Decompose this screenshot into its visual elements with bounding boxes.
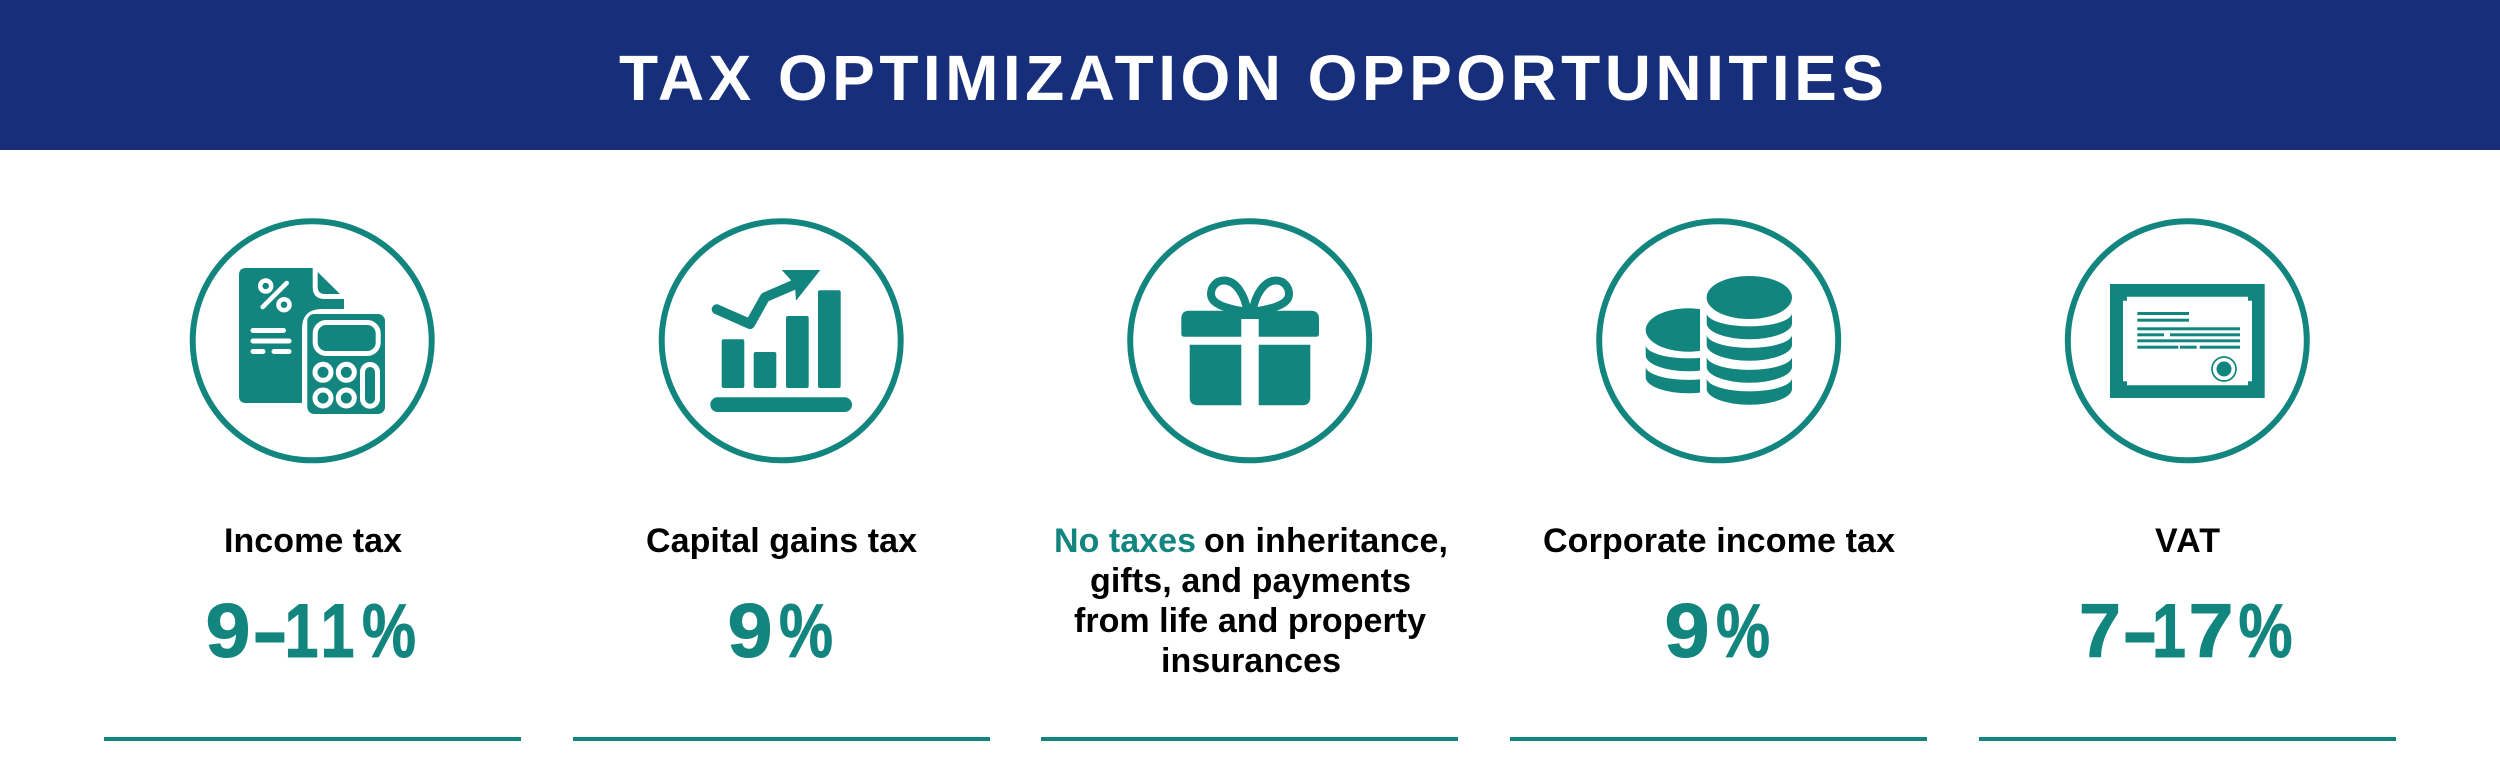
icon: coin stacks <box>1599 221 1838 460</box>
label: no taxes on inheritance, gifts, and payments from life and property insurances <box>1054 522 1448 680</box>
value: 7-17%: % <box>2238 589 2292 674</box>
label: no taxes on inheritance, gifts, and payments from life and property insurances: No taxes <box>1054 522 1196 560</box>
divider <box>1510 737 1927 741</box>
value: 9-11%: - <box>252 589 288 674</box>
divider <box>104 737 521 741</box>
value: 9-11%: % <box>362 589 416 674</box>
icon: gift box <box>1130 221 1369 460</box>
value: 9-11%: 1 <box>320 589 354 674</box>
divider <box>573 737 990 741</box>
value: 7-17%: 7 <box>2188 589 2234 674</box>
icon: certificate <box>2068 221 2307 460</box>
panel: corporate income tax <box>1510 221 1927 741</box>
label: no taxes on inheritance, gifts, and payments from life and property insurances: from life and property <box>1074 602 1426 640</box>
value: 7-17%: - <box>2122 589 2158 674</box>
icon: rising bar chart <box>662 221 901 460</box>
panel: income tax <box>104 221 521 741</box>
label: VAT: VAT <box>2155 522 2220 560</box>
title banner <box>0 0 2500 150</box>
value: 9-11%: 9 <box>206 589 250 674</box>
icon: tax document and calculator <box>193 221 432 460</box>
label: no taxes on inheritance, gifts, and payments from life and property insurances: gifts, and payments <box>1090 562 1411 600</box>
value: 9%: 9 <box>728 589 772 674</box>
label: income tax: Income tax <box>224 522 402 560</box>
value: 9-11%: 1 <box>284 589 318 674</box>
value: 9%: 9 <box>1664 589 1710 674</box>
label: corporate income tax: Corporate income tax <box>1543 522 1895 560</box>
panel: capital gains tax <box>573 221 990 741</box>
divider <box>1979 737 2396 741</box>
label: capital gains tax: Capital gains tax <box>646 522 917 560</box>
value: 7-17%: 1 <box>2152 589 2186 674</box>
label: no taxes on inheritance, gifts, and payments from life and property insurances: insurances <box>1161 642 1341 680</box>
divider <box>1041 737 1458 741</box>
title: TAX OPTIMIZATION OPPORTUNITIES <box>619 42 1884 114</box>
value: 9%: % <box>779 589 833 674</box>
panel: VAT <box>1979 221 2396 741</box>
value: 9%: % <box>1716 589 1770 674</box>
value: 7-17%: 7 <box>2079 589 2121 674</box>
panel: no taxes on inheritance <box>1041 221 1458 741</box>
label: no taxes on inheritance, gifts, and payments from life and property insurances: on inheritance, <box>1204 522 1448 560</box>
